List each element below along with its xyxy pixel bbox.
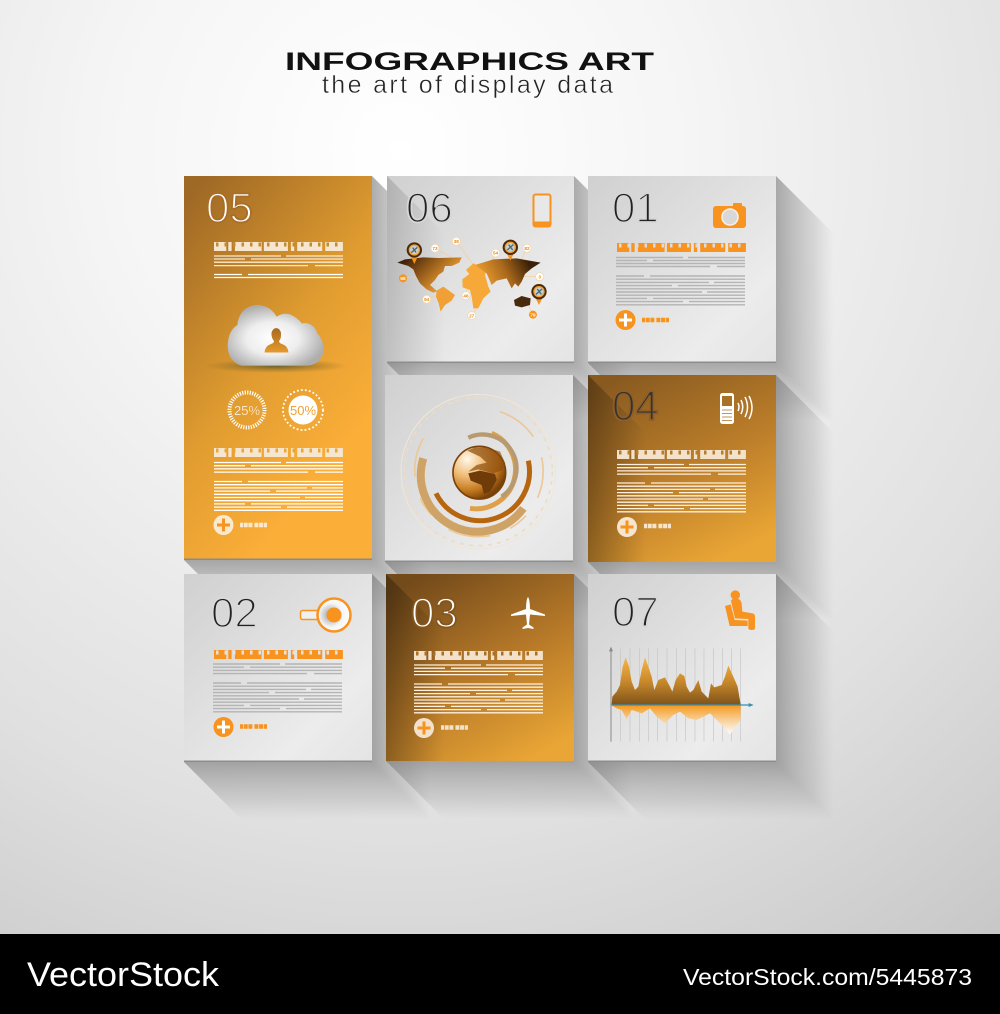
icon: plus button (616, 310, 669, 330)
title (285, 48, 654, 99)
panel: card 01 (588, 176, 776, 363)
icon: plus button (214, 515, 267, 535)
world map (397, 237, 547, 320)
map value labels: 46 (463, 293, 469, 298)
globe (453, 446, 506, 499)
footer band: VectorStock (27, 956, 220, 994)
map value labels: 68 (400, 276, 406, 281)
number 05: 05 (206, 184, 253, 231)
area chart (609, 647, 754, 742)
greeked text block (617, 452, 746, 512)
chart: 50% ring: 50% (290, 403, 316, 418)
panel: card 06 (387, 176, 574, 363)
footer band (0, 934, 1000, 1014)
greeked text block (414, 654, 543, 713)
icon: plus button (617, 517, 671, 537)
map value labels: 79 (530, 312, 536, 317)
map value labels: 27 (469, 313, 475, 318)
number 01: 01 (612, 184, 659, 231)
map connectors (403, 241, 540, 316)
australia (514, 296, 531, 307)
icon: camera (713, 203, 746, 228)
greeked text block (213, 652, 343, 712)
number 04: 04 (612, 382, 659, 429)
number 03: 03 (411, 589, 458, 636)
map value labels: 54 (493, 251, 499, 256)
icon: toggle (300, 598, 350, 632)
map value labels: 3 (538, 274, 541, 279)
chart: 25% ring (230, 392, 264, 428)
greeked text: lower block (214, 450, 343, 510)
icon: smartphone (533, 194, 551, 226)
panel: card 04 (588, 375, 776, 562)
north america (397, 257, 462, 293)
map value labels: 73 (432, 246, 438, 251)
icon: airplane (511, 597, 545, 629)
icon: seated person (725, 590, 755, 630)
map value labels: 82 (524, 246, 530, 251)
number 02: 02 (211, 589, 258, 636)
icon: mobile phone with signal (720, 393, 752, 424)
title: the art of display data (322, 71, 613, 99)
panel: card 05 (184, 176, 372, 560)
icon: cloud with user (204, 305, 348, 373)
number 07: 07 (612, 588, 659, 635)
number 06: 06 (406, 184, 453, 231)
map value labels: 38 (454, 239, 459, 244)
europe and africa (462, 263, 491, 308)
south america (436, 287, 455, 312)
panel: card 07 (588, 574, 776, 762)
map pins (407, 240, 547, 305)
map value labels (399, 237, 544, 320)
panel: center globe card (385, 375, 573, 562)
icon: plus button (414, 718, 468, 738)
graphic: globe with rings (401, 394, 556, 549)
greeked text block (616, 246, 746, 305)
long card shadows (184, 176, 834, 820)
map value labels: 94 (424, 297, 430, 302)
icon: plus button (214, 717, 267, 737)
title: INFOGRAPHICS ART (285, 48, 654, 76)
panel: card 02 (184, 574, 372, 762)
panel: card 03 (386, 574, 574, 761)
chart: 50% ring (283, 390, 323, 430)
footer band: VectorStock.com/5445873 (683, 964, 972, 990)
asia (475, 258, 541, 288)
greeked text: upper block (214, 244, 343, 278)
chart: 25% ring: 25% (234, 403, 260, 418)
